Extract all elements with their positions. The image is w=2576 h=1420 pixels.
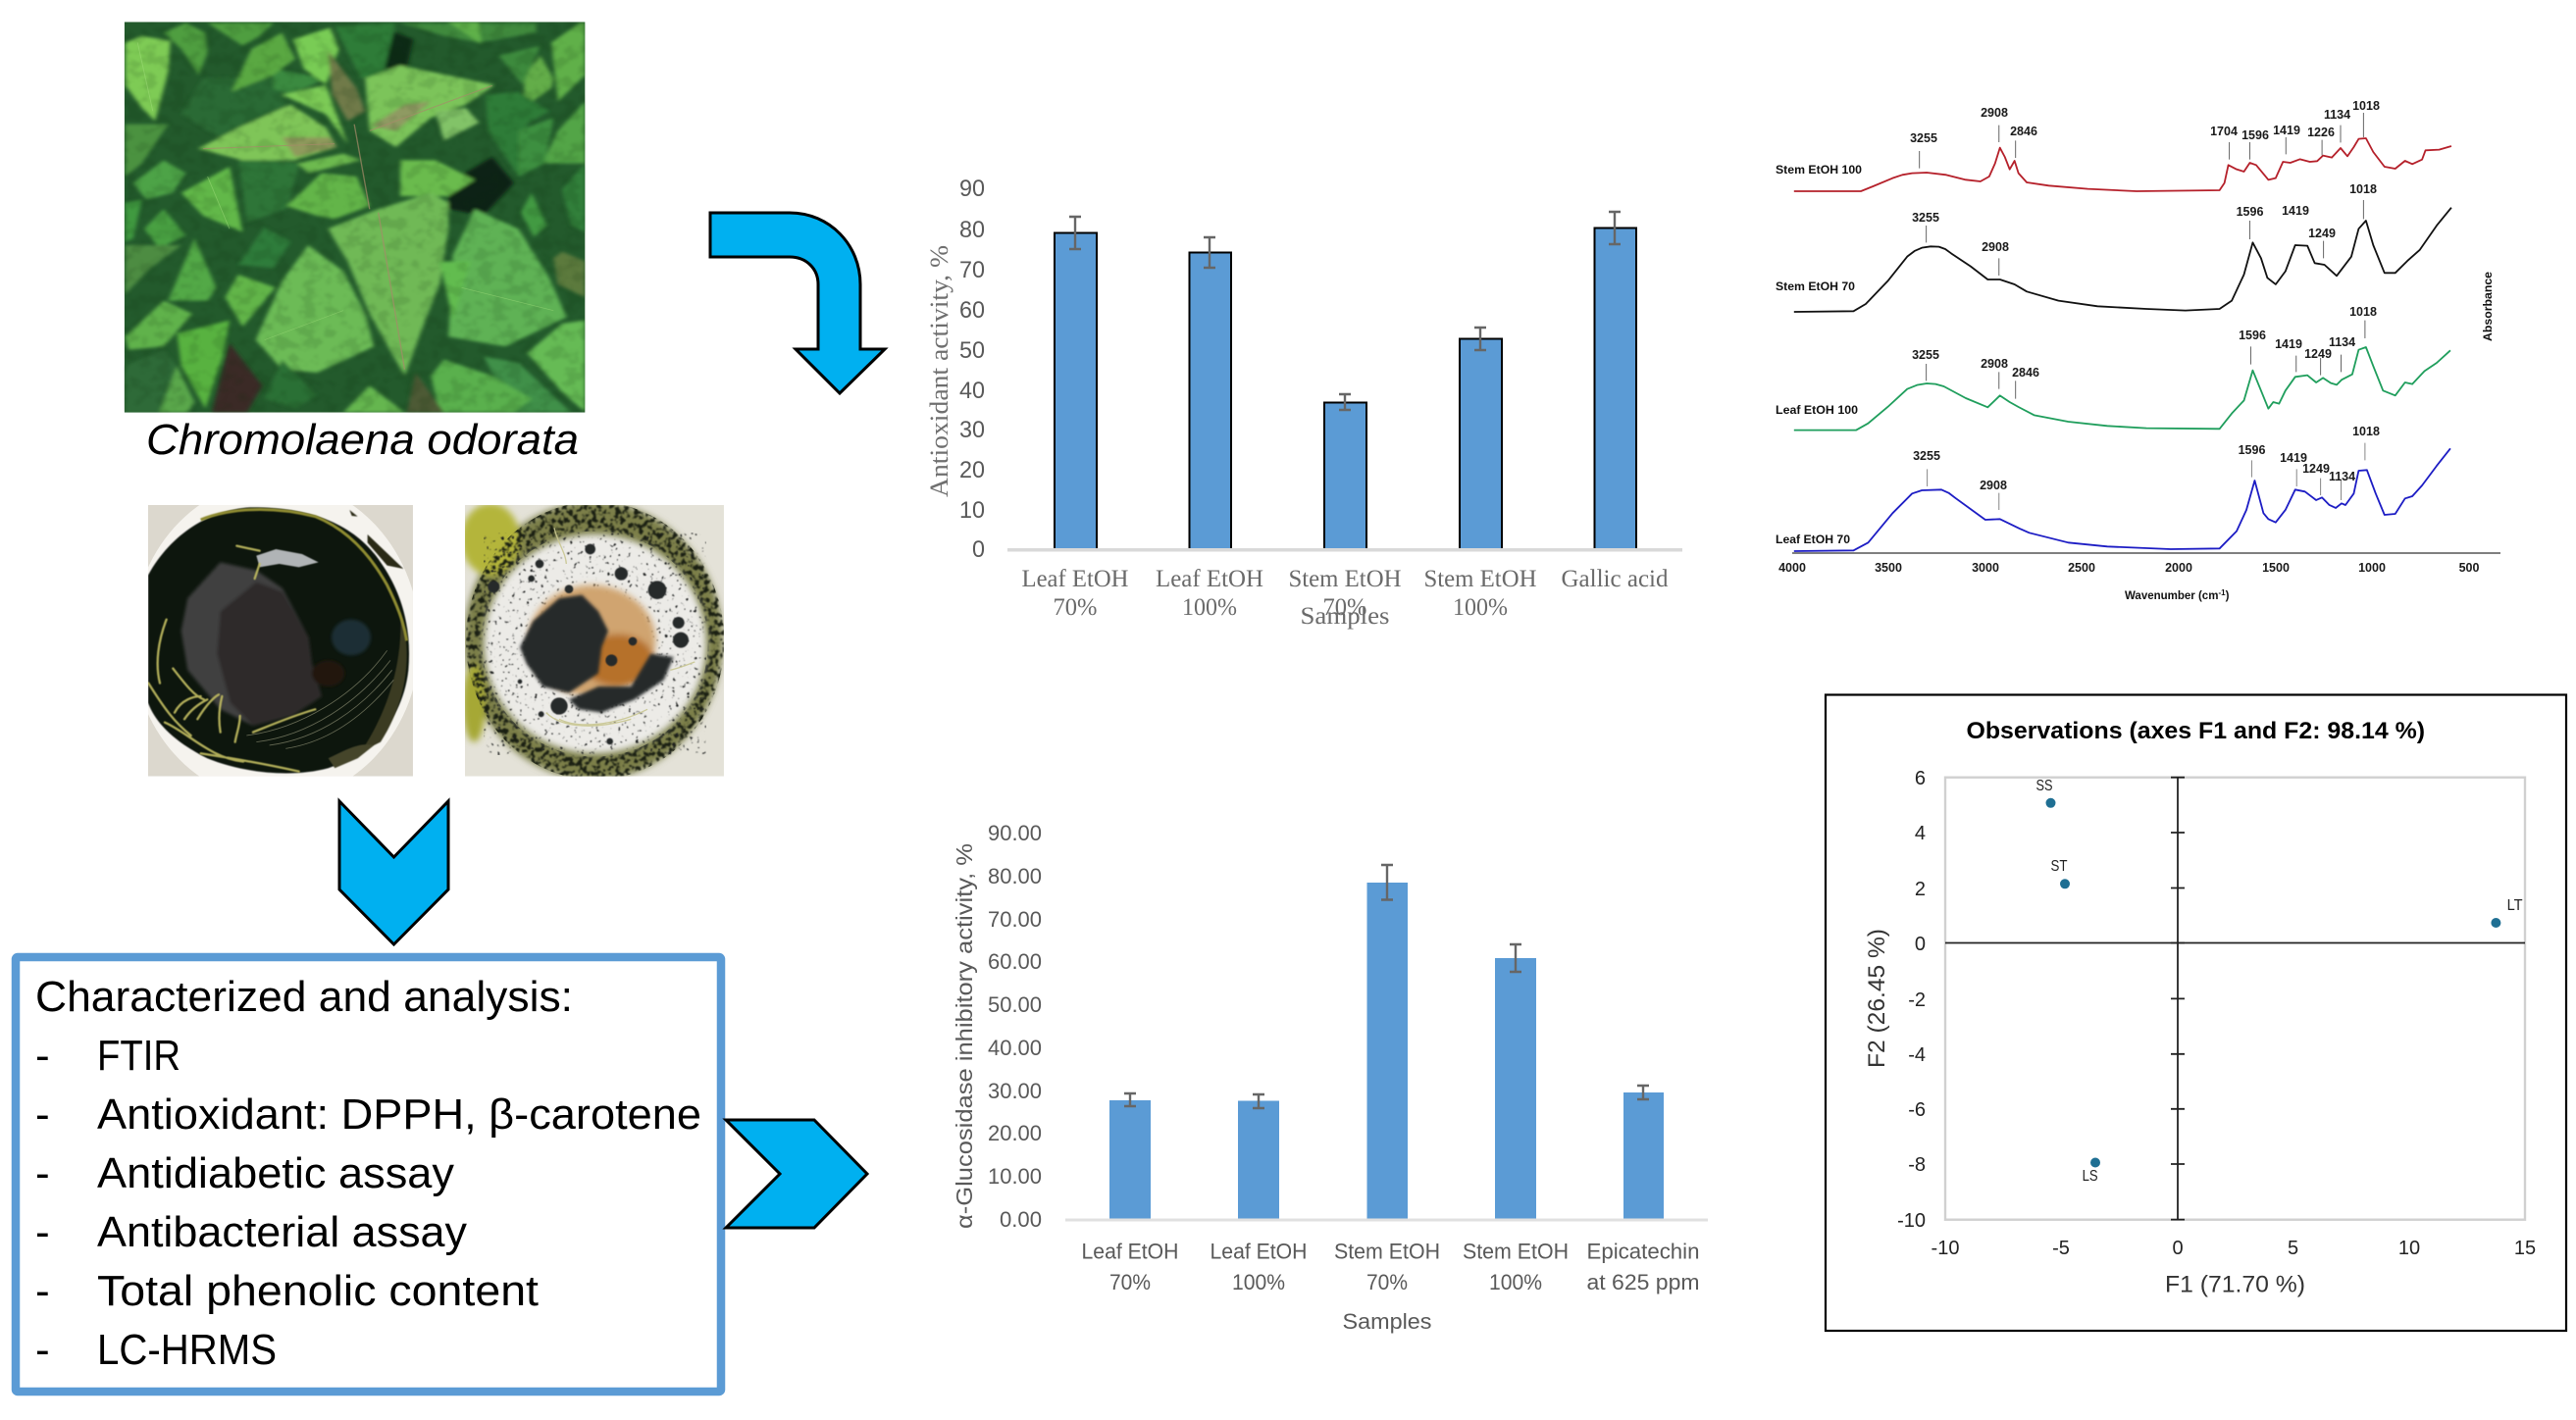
spectrum: Leaf EtOH 70 (blue): Leaf EtOH 70 xyxy=(1776,534,1850,546)
y axis ticks: 0.00 xyxy=(1000,1207,1042,1232)
y axis ticks: 90.00 xyxy=(988,821,1042,845)
spectrum: Stem EtOH 100 (red): 3255 xyxy=(1910,131,1937,145)
y axis ticks: 50 xyxy=(959,337,985,364)
spectrum: Stem EtOH 70 (black): 3255 xyxy=(1912,211,1939,225)
spectrum: Leaf EtOH 100 (green): 1419 xyxy=(2275,337,2302,351)
category labels: Stem EtOH xyxy=(1334,1240,1440,1263)
wavenumber axis: 1500 xyxy=(2262,561,2290,575)
x axis title: wavenumber: ) xyxy=(2226,590,2230,602)
category labels: 70% xyxy=(1366,1270,1408,1294)
spectrum: Leaf EtOH 100 (green): 1596 xyxy=(2239,329,2266,342)
category labels: Epicatechin xyxy=(1587,1240,1699,1263)
spectrum: Stem EtOH 70 (black): 1419 xyxy=(2282,204,2309,218)
category labels: Stem EtOH xyxy=(1289,566,1401,592)
category labels: Leaf EtOH xyxy=(1081,1240,1179,1263)
data points: LT xyxy=(2507,897,2523,914)
plot frame and axes xyxy=(1945,778,2525,1220)
data points: ST xyxy=(2050,858,2068,875)
spectrum: Stem EtOH 100 (red): 1134 xyxy=(2324,108,2350,122)
wavenumber axis xyxy=(1778,553,2500,575)
bars xyxy=(1055,228,1636,550)
spectrum: Stem EtOH 100 (red): 1018 xyxy=(2352,99,2380,113)
y axis ticks: 20.00 xyxy=(988,1121,1042,1145)
list item: LC-HRMS xyxy=(35,1326,277,1374)
x axis ticks: -10 xyxy=(1932,1238,1959,1259)
photo: dried extract in dish xyxy=(461,502,724,780)
error bars xyxy=(1124,865,1649,1108)
y axis ticks: -2 xyxy=(1908,989,1926,1011)
category labels xyxy=(1022,566,1669,621)
spectrum: Stem EtOH 100 (red): 2908 xyxy=(1981,106,2008,120)
y axis ticks: 4 xyxy=(1915,823,1926,844)
y axis ticks: 0 xyxy=(972,536,985,563)
arrow: curved from plant to antioxidant chart xyxy=(710,213,885,393)
wavenumber axis: 2500 xyxy=(2068,561,2095,575)
bar chart: antioxidant activity xyxy=(925,176,1682,630)
y axis ticks: 80 xyxy=(959,217,985,243)
category labels: 100% xyxy=(1489,1270,1542,1294)
spectrum: Stem EtOH 100 (red): 1226 xyxy=(2307,126,2335,139)
spectrum: Leaf EtOH 70 (blue): 3255 xyxy=(1913,449,1940,463)
data points xyxy=(2036,778,2523,1185)
spectrum: Leaf EtOH 70 (blue): 1249 xyxy=(2302,462,2330,476)
x axis ticks: 15 xyxy=(2514,1238,2536,1259)
list item: total phenolic content: Total phenolic content xyxy=(97,1267,539,1315)
list item: antibacterial: Antibacterial assay xyxy=(97,1208,467,1256)
list item: LC-HRMS: - xyxy=(35,1326,50,1374)
category labels: at 625 ppm xyxy=(1587,1270,1699,1294)
category labels: Leaf EtOH xyxy=(1156,566,1263,592)
x axis ticks: 0 xyxy=(2172,1238,2184,1259)
spectrum: Leaf EtOH 100 (green): Leaf EtOH 100 xyxy=(1776,405,1858,417)
spectrum: Leaf EtOH 70 (blue): 1134 xyxy=(2329,470,2355,483)
bar chart: alpha-glucosidase inhibitory activity xyxy=(952,821,1708,1334)
y axis ticks: -6 xyxy=(1908,1099,1926,1121)
spectrum: Leaf EtOH 100 (green): 1018 xyxy=(2349,305,2377,319)
y axis ticks xyxy=(959,176,985,563)
category labels: Stem EtOH xyxy=(1424,566,1536,592)
spectrum: Stem EtOH 70 (black): 2908 xyxy=(1982,240,2009,254)
data points: LS xyxy=(2083,1168,2098,1185)
spectrum: Stem EtOH 70 (black): 1596 xyxy=(2237,205,2263,219)
list item: antioxidant: - xyxy=(35,1090,50,1139)
heading: Characterized and analysis: Characterized and analysis: xyxy=(35,973,573,1021)
arrow: chevron right from analysis box to glucosidase chart xyxy=(726,1120,867,1228)
category labels xyxy=(1081,1240,1699,1294)
y axis ticks: -4 xyxy=(1908,1044,1926,1066)
y axis ticks: 60 xyxy=(959,297,985,324)
spectrum: Leaf EtOH 100 (green): 2908 xyxy=(1981,357,2008,371)
y axis ticks: 40.00 xyxy=(988,1036,1042,1060)
wavenumber axis: 3000 xyxy=(1972,561,1999,575)
y axis ticks: -8 xyxy=(1908,1154,1926,1176)
spectrum: Leaf EtOH 100 (green): 2846 xyxy=(2012,366,2039,380)
arrow: chevron down from extracts to analysis box xyxy=(339,801,448,944)
error bars xyxy=(1069,212,1621,410)
spectrum: Leaf EtOH 100 (green) xyxy=(1776,305,2450,431)
y axis title: absorbance: Absorbance xyxy=(2483,272,2495,341)
category labels: 70% xyxy=(1054,594,1097,621)
spectrum: Leaf EtOH 70 (blue) xyxy=(1776,425,2450,551)
spectrum: Leaf EtOH 70 (blue): 1419 xyxy=(2280,451,2307,465)
y axis title: α-Glucosidase inhibitory activity, % xyxy=(952,843,977,1229)
y axis title: Antioxidant activity, % xyxy=(925,245,953,497)
x axis title: Samples xyxy=(1342,1309,1432,1334)
category labels: 100% xyxy=(1232,1270,1285,1294)
y axis ticks: 40 xyxy=(959,378,985,404)
wavenumber axis: 3500 xyxy=(1875,561,1902,575)
category labels: 100% xyxy=(1453,594,1508,621)
spectrum: Stem EtOH 70 (black): 1249 xyxy=(2308,227,2336,240)
y axis ticks: 30 xyxy=(959,417,985,443)
list item: antidiabetic: - xyxy=(35,1149,50,1197)
y axis ticks: 30.00 xyxy=(988,1079,1042,1103)
list item: antioxidant: Antioxidant: DPPH, β-carotene xyxy=(97,1090,701,1139)
y axis title: F2 (26.45 %) xyxy=(1864,929,1890,1068)
spectrum: Stem EtOH 100 (red): 2846 xyxy=(2010,125,2037,138)
data points: SS xyxy=(2036,778,2052,794)
photo: Chromolaena odorata plant xyxy=(125,22,585,413)
spectrum: Stem EtOH 100 (red) xyxy=(1776,99,2451,191)
spectrum: Leaf EtOH 70 (blue): 1596 xyxy=(2239,443,2265,457)
category labels: Gallic acid xyxy=(1562,566,1669,592)
wavenumber axis: 2000 xyxy=(2165,561,2192,575)
y axis ticks: 70.00 xyxy=(988,907,1042,932)
y axis ticks: 70 xyxy=(959,257,985,283)
spectrum: Stem EtOH 70 (black): Stem EtOH 70 xyxy=(1776,281,1855,293)
y axis ticks: 10 xyxy=(959,497,985,524)
spectrum: Leaf EtOH 100 (green): 1249 xyxy=(2304,347,2332,361)
spectrum: Stem EtOH 100 (red): 1704 xyxy=(2210,125,2238,138)
x axis title: wavenumber: Wavenumber (cm xyxy=(2125,590,2218,602)
y axis ticks: 20 xyxy=(959,457,985,483)
x axis title: wavenumber: -1 xyxy=(2218,588,2226,597)
spectrum: Stem EtOH 100 (red): Stem EtOH 100 xyxy=(1776,165,1862,177)
list item: antibacterial: - xyxy=(35,1208,50,1256)
x axis ticks: -5 xyxy=(2052,1238,2070,1259)
y axis ticks: 10.00 xyxy=(988,1164,1042,1189)
category labels: Stem EtOH xyxy=(1463,1240,1569,1263)
category labels: 70% xyxy=(1109,1270,1151,1294)
chart: FTIR spectra xyxy=(1776,99,2500,602)
y axis ticks xyxy=(988,821,1042,1232)
x axis title: Samples xyxy=(1301,603,1389,630)
wavenumber axis: 4000 xyxy=(1778,561,1806,575)
list item: total phenolic content: - xyxy=(35,1267,50,1315)
list item: FTIR: - xyxy=(35,1032,50,1080)
y axis ticks: 50.00 xyxy=(988,992,1042,1017)
x axis ticks: 10 xyxy=(2398,1238,2420,1259)
y axis ticks: 6 xyxy=(1915,768,1926,789)
list item: FTIR: FTIR xyxy=(97,1032,180,1080)
list item: LC-HRMS: LC-HRMS xyxy=(97,1326,277,1374)
category labels: 100% xyxy=(1182,594,1237,621)
x axis title: F1 (71.70 %) xyxy=(2165,1271,2305,1298)
spectrum: Leaf EtOH 100 (green): 3255 xyxy=(1912,348,1939,362)
panel: PCA observations scatter plot xyxy=(1826,694,2566,1331)
wavenumber axis: 500 xyxy=(2459,561,2479,575)
y axis ticks: -10 xyxy=(1897,1210,1926,1232)
spectrum: Stem EtOH 70 (black): 1018 xyxy=(2349,182,2377,196)
spectrum: Stem EtOH 70 (black) xyxy=(1776,182,2451,312)
y axis ticks: 90 xyxy=(959,176,985,202)
list item: antidiabetic: Antidiabetic assay xyxy=(97,1149,454,1197)
list item: FTIR xyxy=(35,1032,180,1080)
spectrum: Leaf EtOH 70 (blue): 2908 xyxy=(1980,479,2007,492)
y axis ticks: 2 xyxy=(1915,879,1926,900)
panel: characterization and analysis list xyxy=(16,957,721,1392)
wavenumber axis: 1000 xyxy=(2358,561,2386,575)
photo: wet extract in dish xyxy=(148,505,413,777)
spectrum: Leaf EtOH 100 (green): 1134 xyxy=(2329,335,2355,349)
caption: Chromolaena odorata: Chromolaena odorata xyxy=(146,416,579,464)
x axis ticks xyxy=(1932,1238,2536,1259)
category labels: Leaf EtOH xyxy=(1211,1240,1307,1263)
spectrum: Leaf EtOH 70 (blue): 1018 xyxy=(2352,425,2380,438)
bars xyxy=(1109,883,1664,1219)
spectrum: Stem EtOH 100 (red): 1596 xyxy=(2241,128,2269,142)
category labels: 70% xyxy=(1322,594,1367,621)
title: Observations (axes F1 and F2: 98.14 %) xyxy=(1966,718,2425,744)
category labels: Leaf EtOH xyxy=(1022,566,1128,592)
y axis ticks: 80.00 xyxy=(988,864,1042,888)
y axis ticks: 60.00 xyxy=(988,949,1042,974)
x axis ticks: 5 xyxy=(2288,1238,2298,1259)
spectrum: Stem EtOH 100 (red): 1419 xyxy=(2273,124,2300,137)
y axis ticks: 0 xyxy=(1915,934,1926,955)
y axis ticks xyxy=(1897,768,1926,1232)
